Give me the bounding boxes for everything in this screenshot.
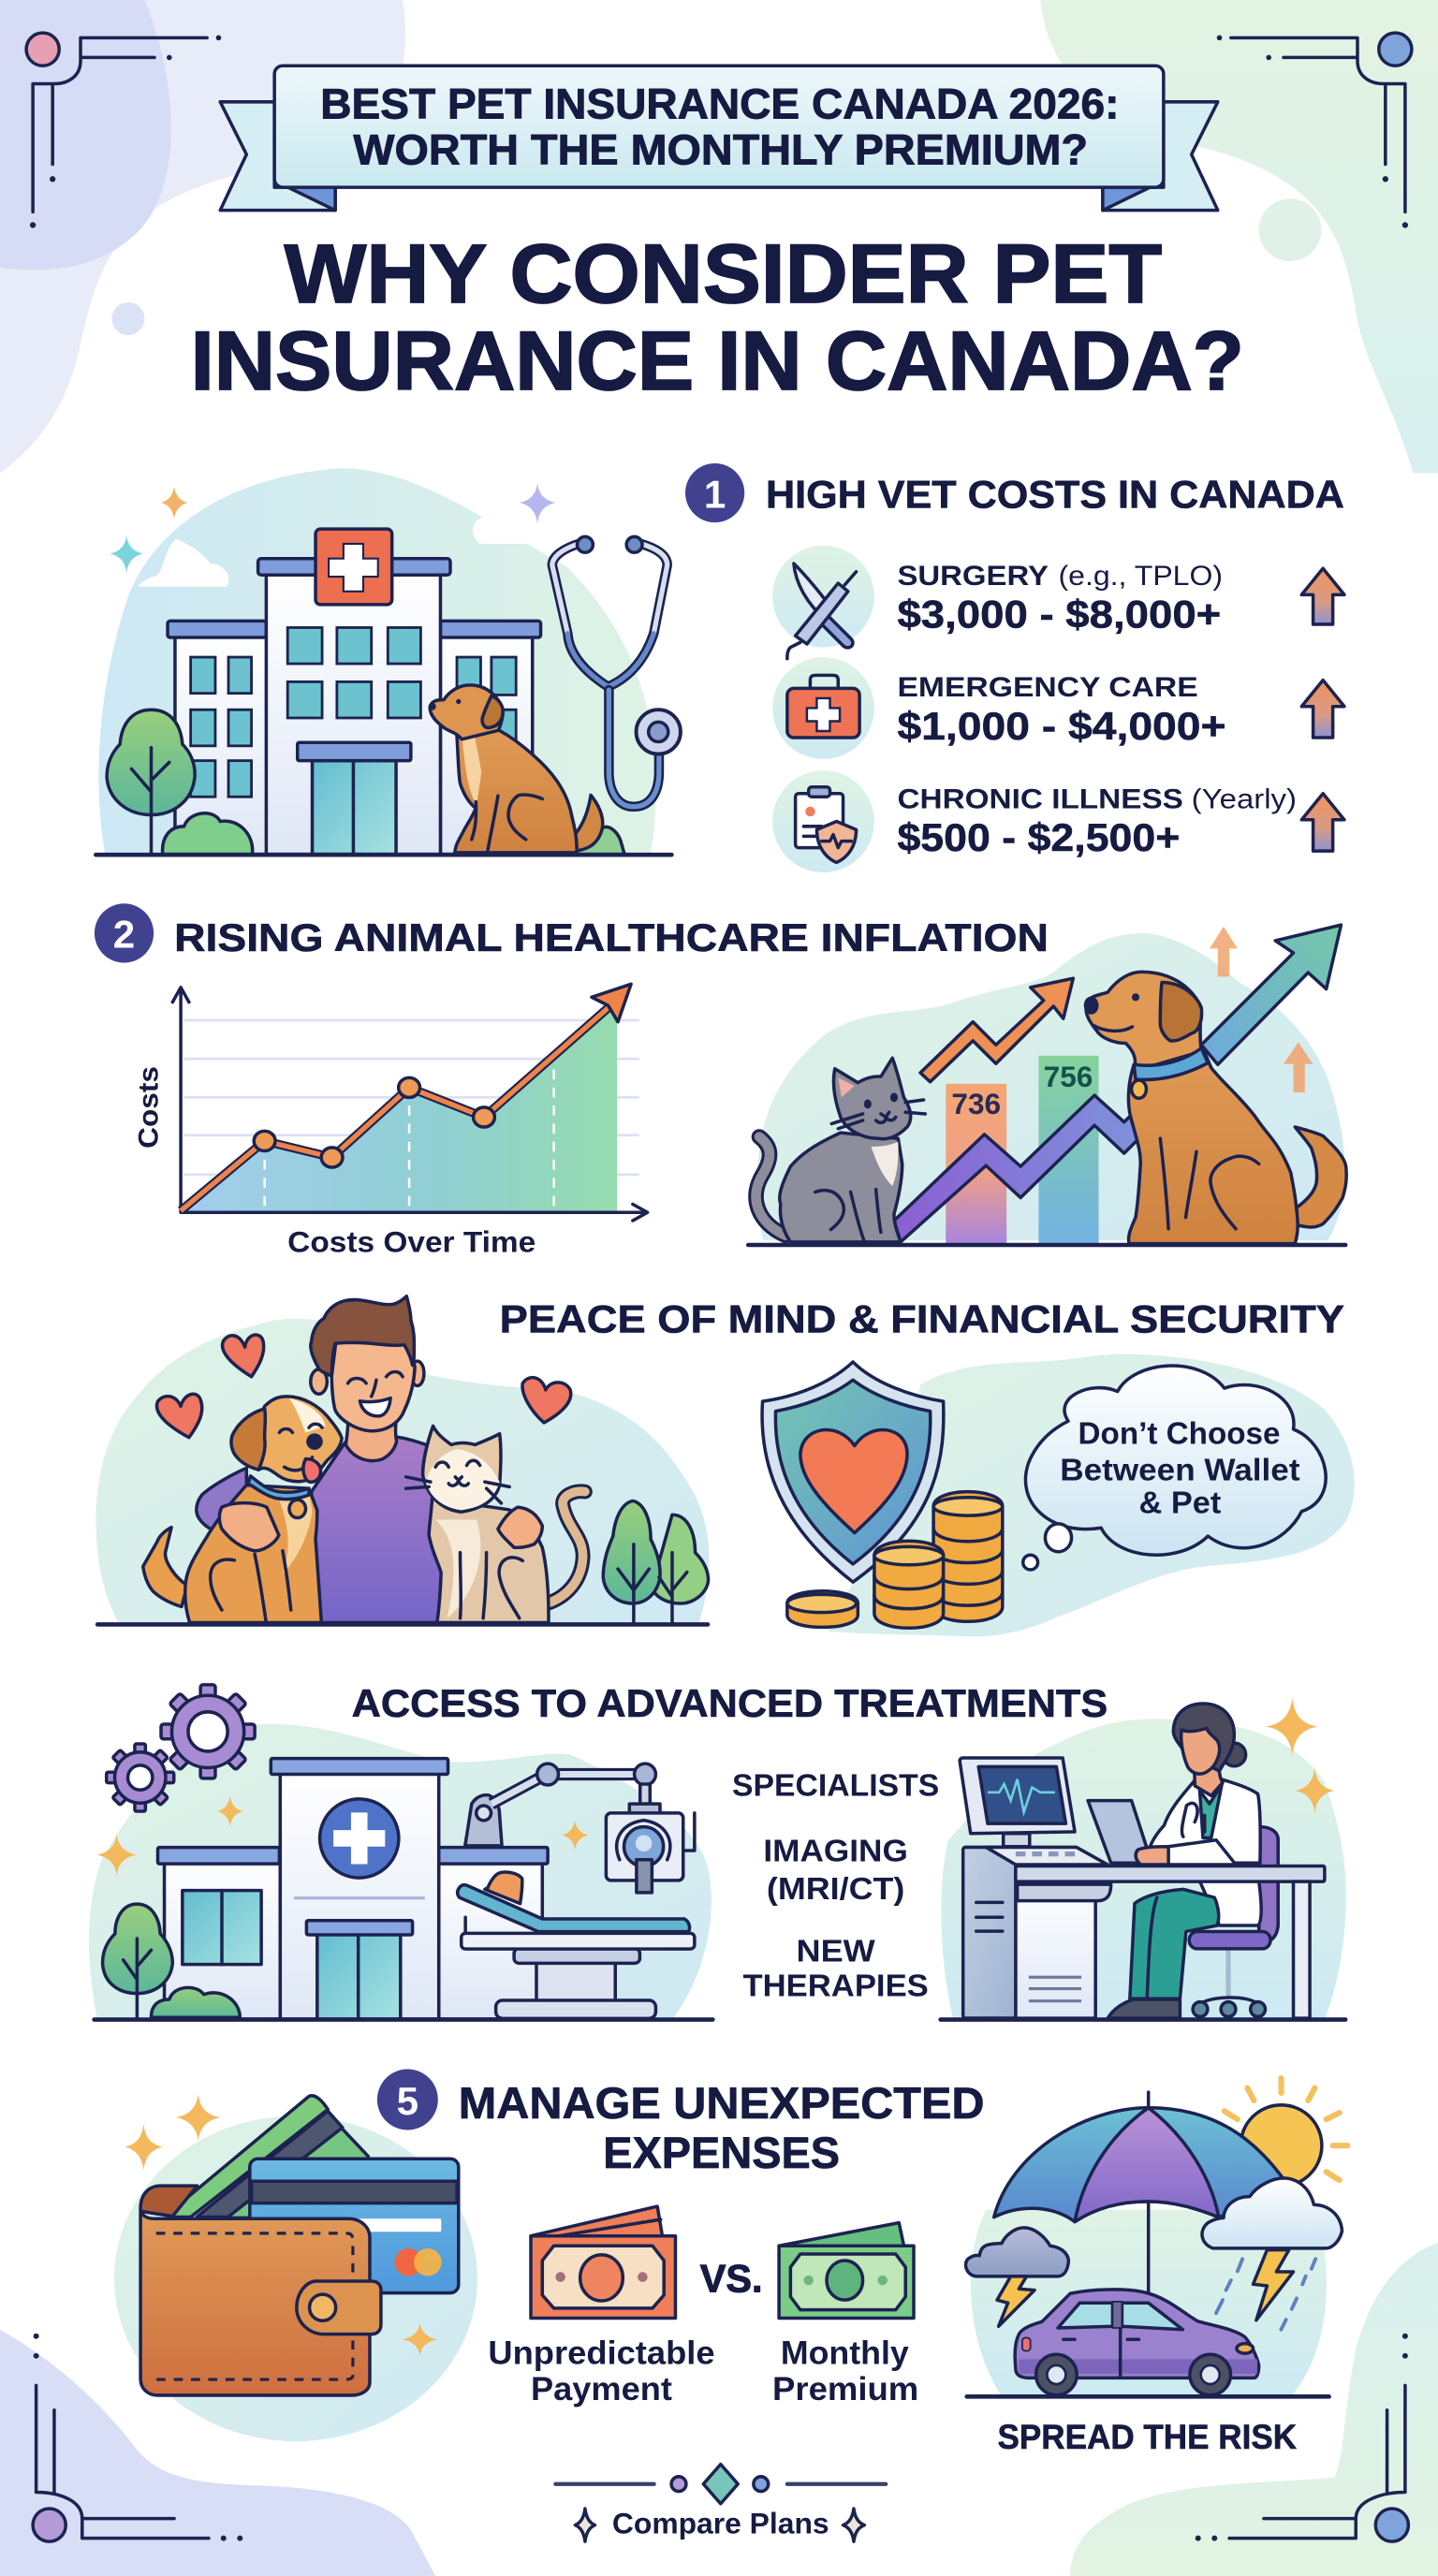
illustration: pets and rising bars: 756 — [1044, 1060, 1093, 1093]
bill labels: Premium — [772, 2371, 918, 2408]
credit card — [250, 2159, 459, 2293]
section number 1: 1 — [704, 472, 726, 516]
imaging table and arm — [458, 1764, 695, 2018]
cost row: chronic illness: $500 - $2,500+ — [897, 815, 1180, 859]
wallet body — [140, 2211, 370, 2395]
cost row: chronic illness — [772, 770, 1344, 872]
bill labels: Monthly — [781, 2335, 909, 2372]
corner ornament: top left — [26, 33, 221, 228]
cost row: chronic illness: (Yearly) — [1192, 784, 1297, 815]
shield — [762, 1362, 944, 1582]
icon: first aid kit — [772, 657, 874, 759]
cloud left — [966, 2228, 1068, 2326]
chair — [1189, 1827, 1278, 2016]
happy dog — [143, 1397, 342, 1623]
coins — [787, 1492, 1003, 1628]
dog sitting — [429, 685, 603, 853]
arrow up — [1301, 794, 1344, 851]
heading: rising inflation: RISING ANIMAL HEALTHCARE INFLATION — [174, 915, 1049, 959]
footer ornament — [555, 2465, 886, 2504]
bill labels: Unpredictable — [488, 2335, 715, 2372]
illustration: doctor at workstation — [938, 1697, 1347, 2022]
illustration: owner with pets — [95, 1296, 710, 1627]
banner title: WORTH THE MONTHLY PREMIUM? — [353, 126, 1088, 174]
treatment labels: NEW — [797, 1935, 875, 1969]
bubble text — [1060, 1417, 1300, 1520]
line chart: costs over time — [134, 984, 648, 1258]
heading: manage unexpected expenses: EXPENSES — [603, 2129, 840, 2178]
doctor — [1088, 1704, 1261, 2018]
hand on dog — [219, 1503, 279, 1551]
panel: rising inflation — [95, 903, 1347, 1258]
gears — [107, 1685, 255, 1811]
bill labels: Payment — [531, 2371, 672, 2408]
illustration: pets and rising bars: 736 — [951, 1087, 1001, 1120]
heading: peace of mind: PEACE OF MIND & FINANCIAL SECURITY — [500, 1296, 1344, 1340]
section number 2: 2 — [113, 913, 135, 957]
hand on cat — [498, 1507, 542, 1547]
bubble text: Don’t Choose — [1078, 1417, 1280, 1452]
illustration: wallet and cards — [114, 2095, 477, 2441]
car — [1015, 2290, 1259, 2395]
heading: manage unexpected expenses: MANAGE UNEXPECTED — [459, 2079, 985, 2129]
icon: clipboard and shield — [772, 770, 874, 872]
cat — [756, 1058, 925, 1242]
cost row: emergency care: EMERGENCY CARE — [897, 672, 1198, 703]
cloud right — [1202, 2178, 1342, 2330]
big dog — [1084, 972, 1346, 1244]
vs label: VS. — [700, 2256, 763, 2300]
icon: orange bill — [531, 2206, 675, 2318]
bubble text: & Pet — [1139, 1486, 1221, 1520]
section number 5: 5 — [397, 2079, 418, 2123]
sparkles — [97, 1795, 588, 1876]
icon: green bill — [779, 2223, 914, 2318]
cost row: surgery — [772, 546, 1344, 659]
illustration: clinic and imaging equipment — [89, 1685, 715, 2022]
happy cat — [406, 1426, 585, 1623]
main title — [191, 227, 1244, 407]
sparkles — [1266, 1697, 1334, 1814]
orange zigzag arrow — [920, 978, 1073, 1082]
banner title: BEST PET INSURANCE CANADA 2026: — [320, 80, 1119, 127]
corner ornament: top right — [1217, 33, 1412, 228]
illustration: pets and rising bars — [746, 925, 1347, 1247]
section number 5 — [377, 2070, 438, 2130]
main title: WHY CONSIDER PET — [285, 227, 1162, 320]
tablet — [1088, 1801, 1152, 1863]
cost row: emergency care: $1,000 - $4,000+ — [897, 704, 1226, 748]
clinic building — [158, 1759, 548, 2019]
x axis label: Costs Over Time — [287, 1224, 536, 1258]
banner title — [320, 80, 1119, 174]
panel: advanced treatments — [89, 1681, 1347, 2022]
section number 1 — [685, 463, 744, 522]
big teal arrow — [1201, 925, 1341, 1064]
arrow up — [1301, 568, 1344, 624]
tree and bushes — [107, 710, 624, 855]
corner ornament: bottom left — [33, 2334, 242, 2541]
panel: high vet costs — [94, 463, 1344, 872]
panel: peace of mind — [95, 1296, 1355, 1636]
heading: advanced treatments: ACCESS TO ADVANCED TREATMENTS — [352, 1681, 1108, 1725]
bill labels — [488, 2335, 918, 2408]
cost row: emergency care — [772, 657, 1344, 759]
cost row: surgery: $3,000 - $8,000+ — [897, 592, 1221, 636]
cost row: surgery: SURGERY — [897, 561, 1049, 592]
banner — [220, 66, 1218, 211]
icon: scalpel — [772, 546, 874, 659]
umbrella — [994, 2092, 1299, 2291]
illustration: vet hospital — [94, 468, 681, 856]
treatment labels: THERAPIES — [742, 1969, 929, 2003]
treatment labels: IMAGING — [763, 1835, 908, 1869]
stethoscope — [552, 536, 681, 807]
trees — [603, 1500, 709, 1625]
purple zigzag — [894, 1095, 1144, 1242]
cost row: surgery: (e.g., TPLO) — [1058, 561, 1223, 592]
heading: high vet costs: HIGH VET COSTS IN CANADA — [766, 472, 1344, 516]
treatment labels: (MRI/CT) — [767, 1872, 904, 1907]
treatment labels: SPECIALISTS — [732, 1768, 939, 1803]
treatment labels — [732, 1768, 939, 2003]
caption: spread the risk: SPREAD THE RISK — [998, 2418, 1297, 2456]
corner ornament: bottom right — [1196, 2334, 1408, 2541]
sun — [1225, 2078, 1347, 2187]
panel: manage unexpected expenses — [114, 2070, 1347, 2456]
thought bubble — [1023, 1366, 1326, 1570]
main title: INSURANCE IN CANADA? — [191, 314, 1244, 407]
man — [197, 1296, 446, 1623]
bubble text: Between Wallet — [1060, 1453, 1300, 1487]
section number 2 — [95, 903, 154, 962]
tree and bush — [103, 1904, 240, 2019]
heading: manage unexpected expenses — [459, 2079, 985, 2178]
illustration: umbrella and car — [964, 2078, 1347, 2399]
cost row: chronic illness: CHRONIC ILLNESS — [897, 784, 1183, 815]
green bills — [213, 2097, 368, 2217]
footer: compare plans: Compare Plans — [612, 2506, 829, 2539]
arrow up — [1301, 681, 1344, 738]
machine and monitor — [960, 1758, 1325, 2018]
illustration: shield and coins with thought bubble — [762, 1354, 1355, 1636]
y axis label: Costs — [134, 1066, 165, 1149]
hearts — [157, 1335, 571, 1438]
